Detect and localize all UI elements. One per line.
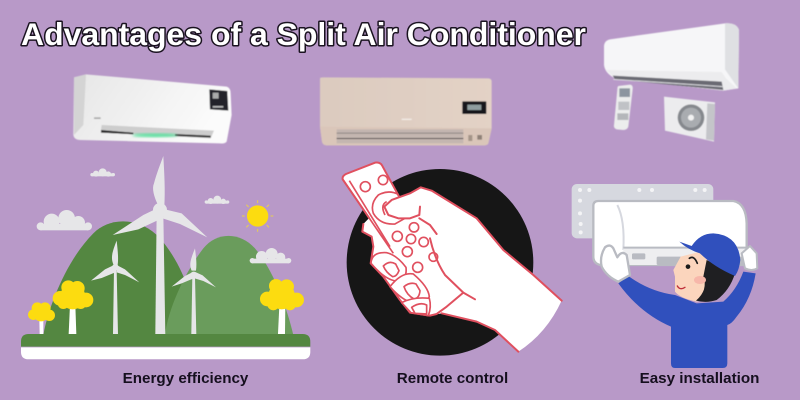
black circle xyxy=(347,169,533,356)
blue work suit xyxy=(618,272,756,368)
hand fill xyxy=(362,187,562,352)
tree medium xyxy=(53,280,93,334)
right glove xyxy=(742,246,757,270)
image: beige wall air conditioner xyxy=(320,77,492,145)
remote edge lines xyxy=(343,179,393,253)
cap xyxy=(679,233,740,276)
clouds xyxy=(37,168,291,263)
remote body xyxy=(343,163,410,253)
dark green hill xyxy=(43,221,197,335)
sun xyxy=(242,201,273,231)
tree right xyxy=(260,279,304,334)
illustration: technician installing AC xyxy=(572,184,757,368)
face xyxy=(673,250,723,302)
indoor unit xyxy=(593,201,747,265)
label: easy installation: Easy installation xyxy=(640,370,759,387)
illustration: energy efficiency landscape xyxy=(21,156,310,359)
fingers xyxy=(371,253,430,316)
image: split air conditioner set xyxy=(604,23,739,142)
outdoor unit xyxy=(664,97,715,142)
indoor unit xyxy=(604,23,739,91)
small wind turbine right xyxy=(172,248,216,334)
light green hill xyxy=(165,236,293,335)
hand outline xyxy=(362,187,562,352)
tree small xyxy=(28,302,55,334)
label: remote control: Remote control xyxy=(397,370,508,387)
remote handset xyxy=(614,85,633,130)
title: Advantages of a Split Air Conditioner xyxy=(21,16,586,52)
ground strip xyxy=(21,334,310,347)
large wind turbine xyxy=(113,156,207,334)
remote buttons xyxy=(360,175,438,272)
facial features xyxy=(677,257,706,289)
illustration: hand holding remote xyxy=(343,163,562,356)
label: energy efficiency: Energy efficiency xyxy=(123,370,249,387)
mounting plate xyxy=(572,184,713,238)
hair xyxy=(696,260,735,302)
left glove xyxy=(601,246,630,282)
small wind turbine left xyxy=(91,241,139,334)
white base xyxy=(21,347,310,359)
image: white wall air conditioner xyxy=(73,74,232,143)
